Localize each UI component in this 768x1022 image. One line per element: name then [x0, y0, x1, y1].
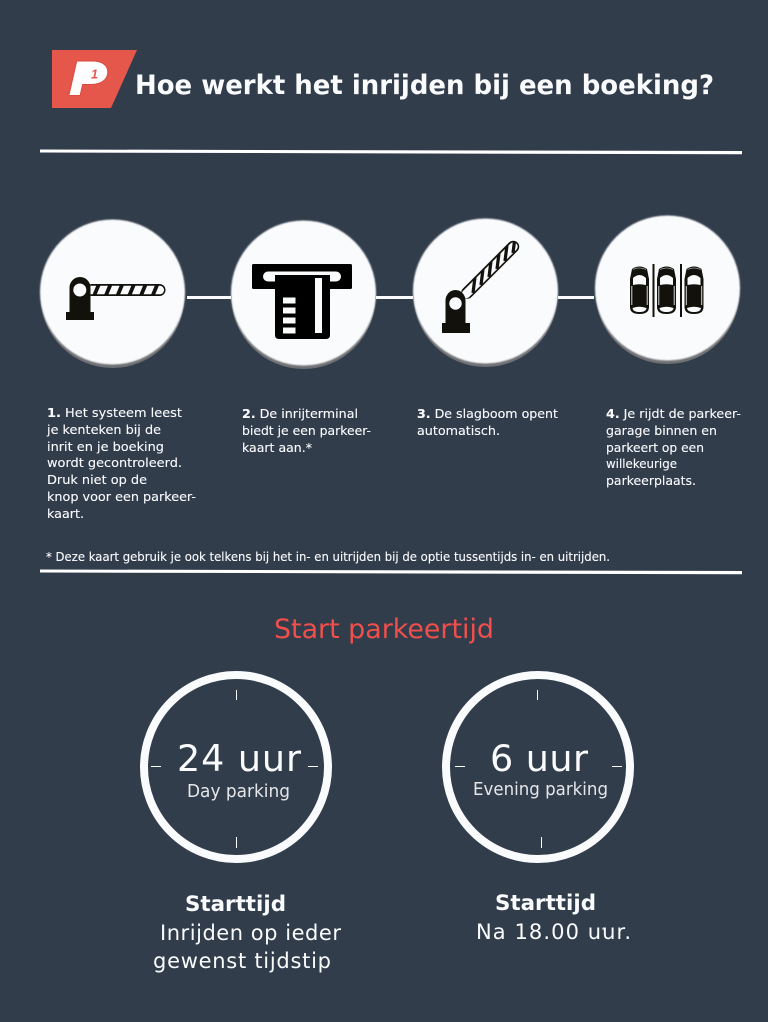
- icon: parked cars: [630, 264, 704, 317]
- step 1 text: inrit en je boeking: [47, 439, 164, 454]
- logo: P1 badge: [52, 50, 137, 108]
- step 4 circle with parked cars icon: [595, 216, 740, 364]
- start time: day parking: Starttijd: [185, 892, 286, 917]
- clock ticks: [455, 690, 622, 848]
- step 2 text: [242, 406, 371, 455]
- step 1 text: [46, 405, 196, 521]
- step 1 text: Druk niet op de: [47, 472, 147, 487]
- step 3 text: [417, 406, 558, 438]
- step 4 text: parkeerplaats.: [606, 473, 696, 488]
- start time: evening parking: Na 18.00 uur.: [476, 920, 631, 944]
- clock ticks: [151, 690, 318, 848]
- step 3 text: automatisch.: [417, 423, 500, 438]
- step 2 text: 2. De inrijterminal: [242, 406, 358, 421]
- step 3 circle with barrier open icon: [413, 218, 558, 367]
- title: Hoe werkt het inrijden bij een boeking?: [135, 70, 714, 101]
- connector lines: [187, 296, 594, 299]
- step 2 text: kaart aan.*: [242, 440, 312, 455]
- step 4 text: willekeurige: [606, 456, 677, 471]
- start time: day parking: [153, 892, 341, 973]
- step 2 circle with card terminal icon: [231, 220, 376, 369]
- duration: 6 uur: [490, 737, 588, 780]
- start time: day parking: Inrijden op ieder: [160, 921, 341, 945]
- duration: 24 uur: [177, 737, 301, 780]
- second divider: [40, 570, 742, 574]
- step 4 text: garage binnen en: [606, 423, 717, 438]
- start time: evening parking: Starttijd: [495, 891, 596, 916]
- start time: day parking: gewenst tijdstip: [153, 949, 331, 973]
- step 4 text: 4. Je rijdt de parkeer-: [606, 406, 741, 421]
- footnote: * Deze kaart gebruik je ook telkens bij het in- en uitrijden bij de optie tussentijds in- en uitrijden.: [46, 550, 610, 564]
- step 1 circle with barrier closed icon: [40, 220, 185, 368]
- step 2 text: biedt je een parkeer-: [242, 423, 371, 438]
- top divider: [40, 150, 742, 154]
- start time: evening parking: [476, 891, 631, 944]
- section heading: Start parkeertijd: [274, 614, 494, 645]
- step 4 text: parkeert op een: [606, 440, 704, 455]
- label: Day parking: [187, 782, 290, 802]
- step 4 text: [606, 406, 741, 488]
- logo: P1 badge: 1: [91, 68, 98, 82]
- icon: card terminal: [252, 264, 352, 339]
- step 1 text: knop voor een parkeer-: [47, 489, 196, 504]
- clock: 24 uur: [144, 675, 328, 859]
- step 1 text: je kenteken bij de: [46, 422, 161, 437]
- step 1 text: wordt gecontroleerd.: [47, 455, 182, 470]
- clock: 6 uur: [446, 675, 630, 859]
- start time: evening parking: *: [602, 926, 606, 934]
- label: Evening parking: [473, 780, 608, 800]
- step 1 text: kaart.: [47, 506, 84, 521]
- logo: P1 badge: P: [70, 53, 107, 104]
- icon: closed barrier: [66, 277, 166, 320]
- icon: open barrier: [442, 237, 522, 333]
- step 3 text: 3. De slagboom opent: [417, 406, 558, 421]
- step 1 text: 1. Het systeem leest: [47, 405, 182, 420]
